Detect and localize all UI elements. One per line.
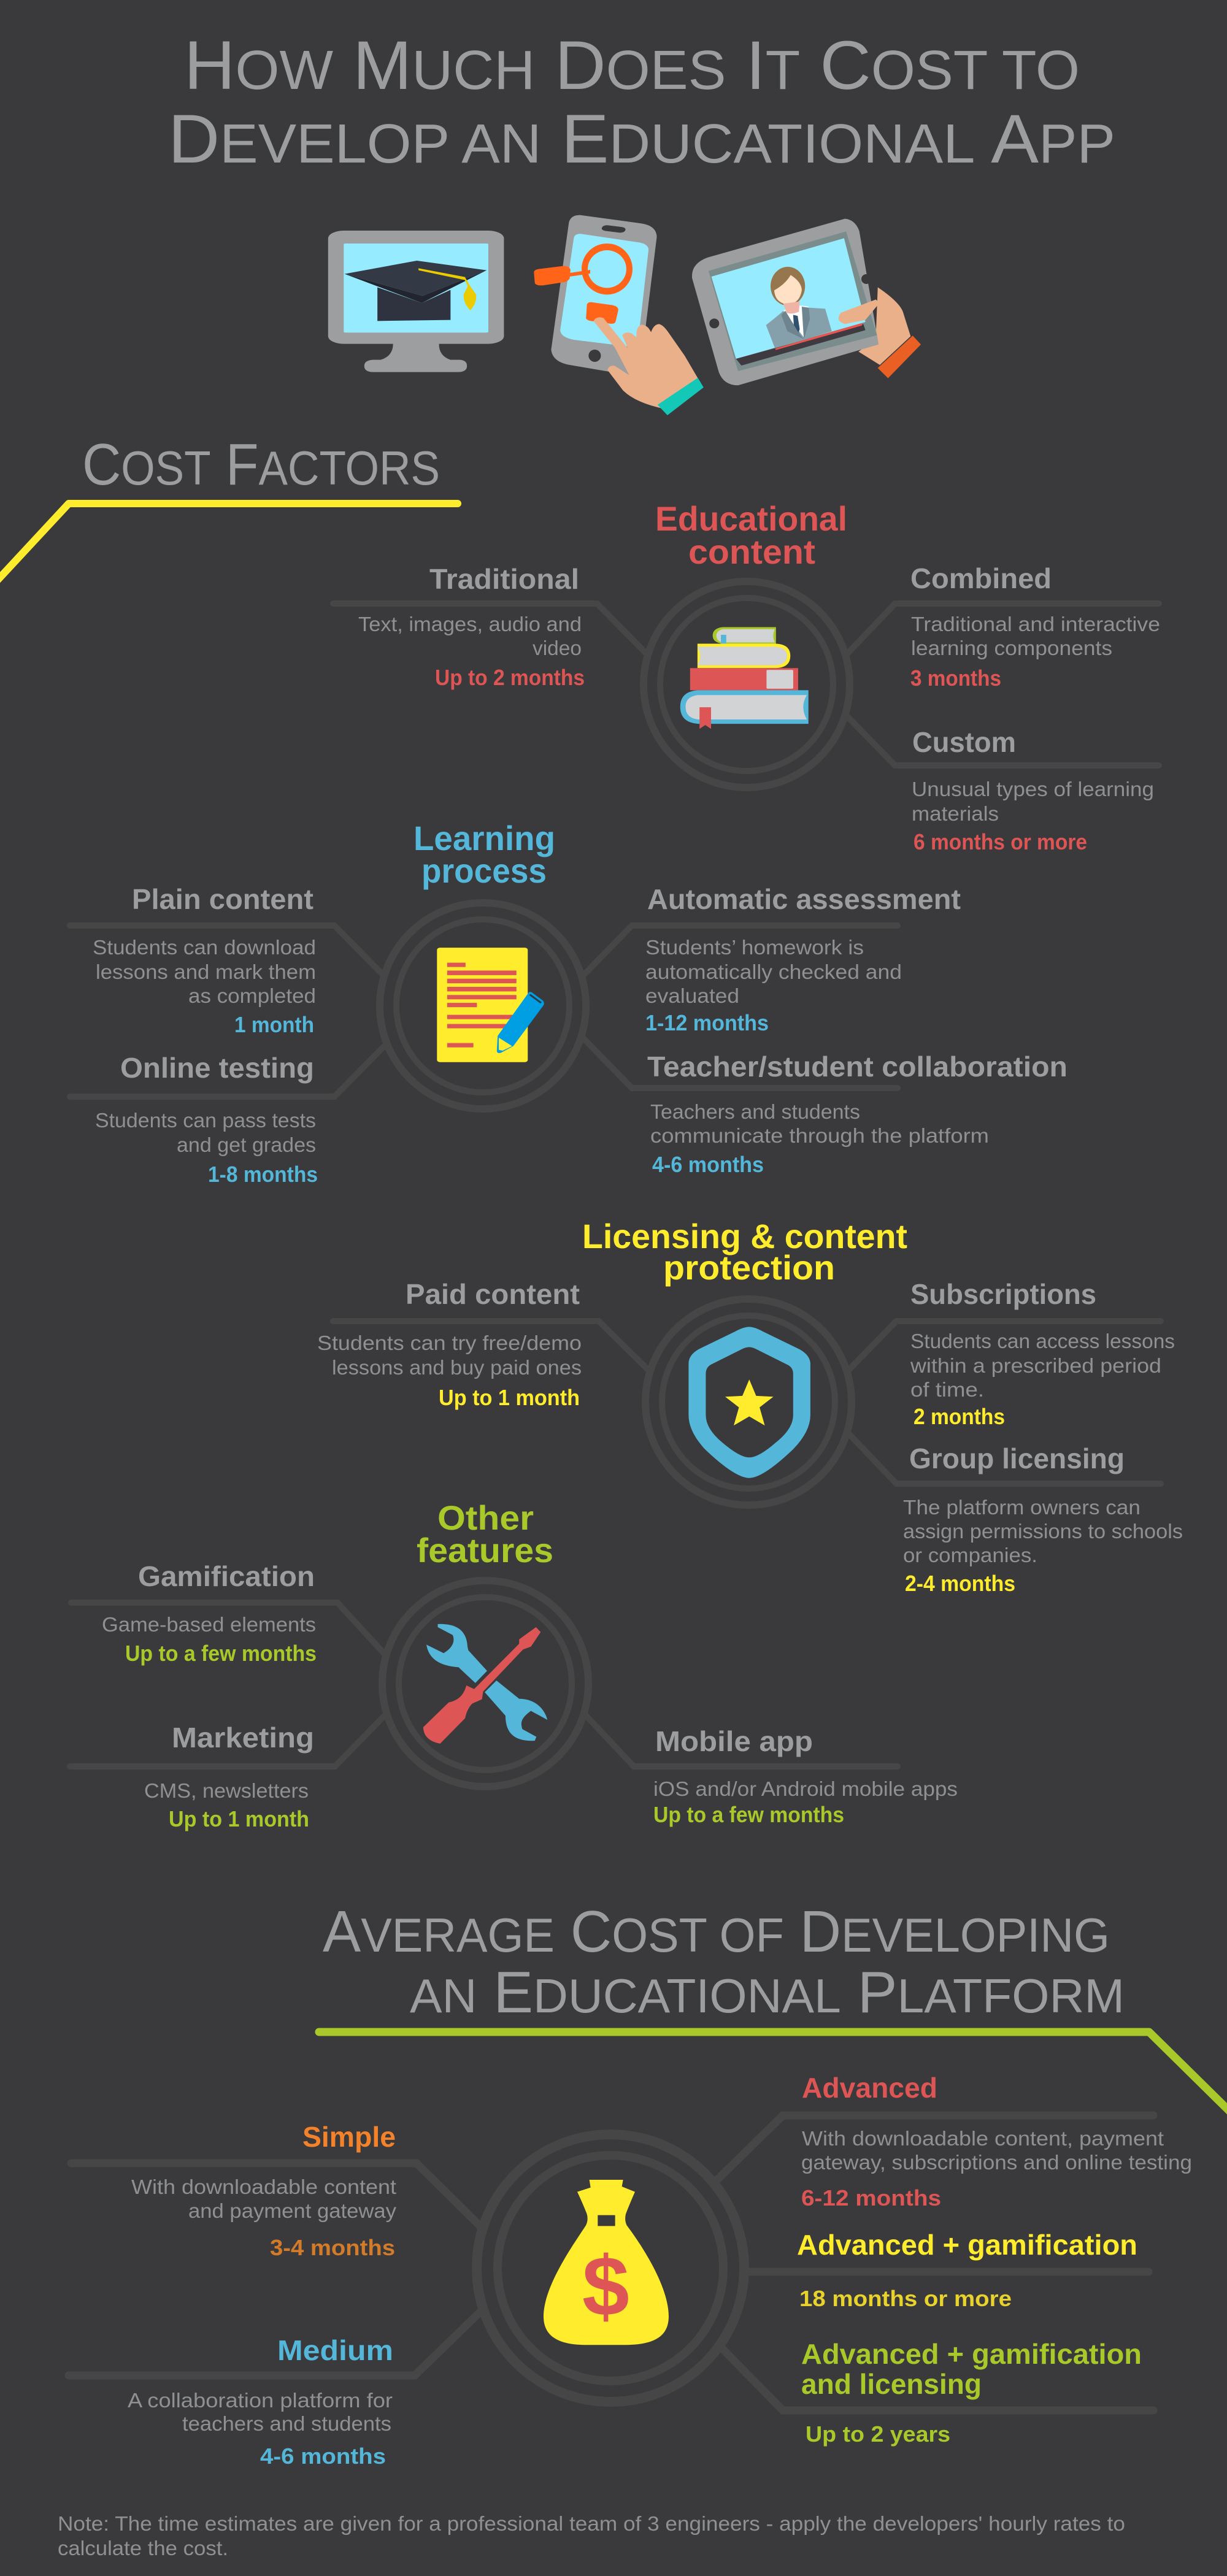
heading: learning process bbox=[413, 819, 555, 890]
item: simple: Simple bbox=[302, 2121, 396, 2153]
heading: other features bbox=[417, 1498, 553, 1570]
item: advanced: 6-12 months bbox=[801, 2185, 941, 2210]
item: medium: teachers and students bbox=[182, 2412, 391, 2435]
item: medium bbox=[128, 2334, 393, 2469]
connector lines bbox=[69, 2115, 1153, 2410]
footnote bbox=[58, 2512, 1125, 2559]
item: automatic assessment: evaluated bbox=[645, 984, 739, 1007]
icon: wrench and screwdriver bbox=[423, 1624, 547, 1744]
heading: licensing and content protection: protection bbox=[663, 1248, 835, 1287]
item: gamification: Game-based elements bbox=[102, 1613, 316, 1636]
panel: learning process bbox=[70, 819, 1067, 1187]
heading: other features: Other bbox=[437, 1498, 534, 1537]
item: advanced: With downloadable content, payment bbox=[802, 2127, 1164, 2150]
icon: shield with star bbox=[688, 1327, 810, 1478]
item: advanced + gamification and licensing: Advanced + gamification bbox=[801, 2338, 1142, 2370]
title bbox=[168, 27, 1115, 177]
item: advanced + gamification and licensing: and licensing bbox=[801, 2368, 982, 2400]
item: combined bbox=[910, 562, 1160, 691]
item: medium: A collaboration platform for bbox=[128, 2389, 393, 2412]
item: advanced: gateway, subscriptions and online testing bbox=[801, 2151, 1192, 2174]
item: teacher/student collaboration: Teacher/student collaboration bbox=[647, 1051, 1067, 1083]
item: advanced + gamification: Advanced + gamification bbox=[797, 2229, 1137, 2261]
icon: phone with magnifier and hand bbox=[534, 215, 704, 415]
item: teacher/student collaboration: 4-6 months bbox=[652, 1152, 764, 1177]
heading: average cost: AVERAGE COST OF DEVELOPING bbox=[323, 1899, 1110, 1965]
item: simple: and payment gateway bbox=[188, 2199, 397, 2222]
hero illustration: monitor, phone, tablet bbox=[328, 215, 921, 415]
icon: document and pencil bbox=[437, 948, 544, 1062]
icon: money bag bbox=[544, 2180, 669, 2345]
heading: other features: features bbox=[417, 1531, 553, 1570]
item: automatic assessment: Students’ homework is bbox=[645, 936, 864, 959]
heading: licensing and content protection bbox=[582, 1217, 907, 1287]
item: subscriptions: 2 months bbox=[914, 1404, 1005, 1429]
item: group licensing: Group licensing bbox=[909, 1443, 1125, 1474]
panel: educational content bbox=[333, 499, 1160, 854]
item: plain content: Plain content bbox=[132, 883, 313, 915]
item: paid content: lessons and buy paid ones bbox=[332, 1356, 582, 1379]
connector lines bbox=[70, 926, 898, 1097]
rings bbox=[645, 1299, 852, 1505]
item: paid content: Students can try free/demo bbox=[317, 1332, 582, 1354]
heading: average cost bbox=[323, 1899, 1125, 2025]
item: advanced: Advanced bbox=[802, 2072, 937, 2104]
item: plain content: lessons and mark them bbox=[96, 960, 316, 983]
item: subscriptions bbox=[910, 1278, 1175, 1429]
item: paid content: Up to 1 month bbox=[439, 1385, 580, 1410]
item: advanced + gamification and licensing: Up to 2 years bbox=[806, 2421, 950, 2447]
item: paid content bbox=[317, 1278, 582, 1410]
heading: educational content: content bbox=[688, 532, 815, 571]
heading: educational content bbox=[655, 499, 847, 571]
item: automatic assessment bbox=[645, 883, 961, 1035]
item: traditional: video bbox=[533, 637, 582, 659]
item: custom: 6 months or more bbox=[914, 829, 1087, 854]
item: subscriptions: within a prescribed period bbox=[910, 1354, 1161, 1377]
item: combined: learning components bbox=[911, 637, 1112, 659]
item: mobile app: Up to a few months bbox=[653, 1802, 844, 1827]
item: group licensing: 2-4 months bbox=[905, 1571, 1015, 1596]
item: custom: Custom bbox=[912, 726, 1016, 758]
item: traditional: Traditional bbox=[429, 563, 579, 595]
item: combined: 3 months bbox=[910, 665, 1001, 691]
item: group licensing: assign permissions to schools bbox=[903, 1520, 1183, 1543]
item: online testing: Students can pass tests bbox=[95, 1109, 316, 1132]
item: medium: Medium bbox=[277, 2334, 393, 2366]
heading: average cost: AN EDUCATIONAL PLATFORM bbox=[410, 1960, 1125, 2025]
item: plain content bbox=[93, 883, 316, 1037]
item: gamification: Up to a few months bbox=[125, 1641, 317, 1666]
panel: licensing and content protection bbox=[317, 1217, 1183, 1596]
footnote: Note: The time estimates are given for a professional team of 3 engineers - apply the developers' hourly rates to bbox=[58, 2512, 1125, 2535]
item: paid content: Paid content bbox=[406, 1278, 580, 1310]
item: automatic assessment: automatically checked and bbox=[645, 960, 902, 983]
title: HOW MUCH DOES IT COST TO bbox=[184, 27, 1080, 104]
panel: other features bbox=[70, 1498, 958, 1831]
item: online testing: and get grades bbox=[177, 1133, 316, 1156]
item: plain content: as completed bbox=[188, 984, 316, 1007]
item: custom: materials bbox=[912, 802, 999, 825]
item: automatic assessment: Automatic assessment bbox=[647, 883, 961, 915]
heading: licensing and content protection: Licensing & content bbox=[582, 1217, 907, 1255]
item: teacher/student collaboration: Teachers and students bbox=[650, 1100, 860, 1123]
item: group licensing: The platform owners can bbox=[903, 1496, 1140, 1519]
item: combined: Combined bbox=[910, 562, 1052, 594]
rings bbox=[380, 903, 586, 1109]
item: marketing: Marketing bbox=[172, 1722, 314, 1754]
item: combined: Traditional and interactive bbox=[911, 613, 1160, 635]
item: teacher/student collaboration: communicate through the platform bbox=[650, 1124, 989, 1147]
rings bbox=[382, 1581, 588, 1787]
item: group licensing: or companies. bbox=[903, 1544, 1037, 1566]
item: simple: With downloadable content bbox=[131, 2175, 396, 2198]
item: plain content: 1 month bbox=[234, 1012, 314, 1037]
item: online testing: 1-8 months bbox=[208, 1162, 318, 1187]
heading: educational content: Educational bbox=[655, 499, 847, 538]
item: mobile app: Mobile app bbox=[655, 1725, 813, 1757]
item: advanced + gamification: 18 months or more bbox=[799, 2286, 1012, 2311]
item: gamification: Gamification bbox=[138, 1560, 315, 1592]
item: marketing bbox=[144, 1722, 314, 1831]
item: group licensing bbox=[903, 1443, 1183, 1596]
green heading rule bbox=[319, 2032, 1227, 2115]
icon: monitor with graduation cap bbox=[328, 231, 504, 372]
connector lines bbox=[70, 1603, 898, 1766]
item: traditional: Text, images, audio and bbox=[358, 613, 582, 635]
item: plain content: Students can download bbox=[93, 936, 316, 959]
item: custom: Unusual types of learning bbox=[912, 778, 1154, 800]
icon: tablet with teacher and hand bbox=[692, 219, 921, 385]
footnote: calculate the cost. bbox=[58, 2537, 228, 2559]
icon: money bag: $ bbox=[582, 2239, 629, 2334]
item: mobile app bbox=[653, 1725, 958, 1827]
icon: stack of books bbox=[680, 627, 809, 729]
item: traditional bbox=[358, 563, 585, 690]
item: gamification bbox=[102, 1560, 317, 1666]
item: automatic assessment: 1-12 months bbox=[645, 1010, 769, 1035]
item: simple: 3-4 months bbox=[270, 2235, 395, 2260]
yellow heading rule bbox=[0, 504, 458, 581]
panel: average cost tiers bbox=[69, 2072, 1192, 2469]
connector lines bbox=[333, 1321, 1161, 1484]
item: online testing bbox=[95, 1052, 318, 1187]
item: subscriptions: Students can access lessons bbox=[910, 1330, 1175, 1352]
item: marketing: Up to 1 month bbox=[169, 1806, 309, 1831]
rings bbox=[644, 581, 850, 788]
item: advanced + gamification bbox=[797, 2229, 1137, 2311]
item: advanced + gamification and licensing bbox=[801, 2338, 1142, 2447]
item: marketing: CMS, newsletters bbox=[144, 1779, 309, 1802]
item: online testing: Online testing bbox=[120, 1052, 314, 1084]
item: mobile app: iOS and/or Android mobile apps bbox=[653, 1777, 958, 1800]
connector lines bbox=[333, 604, 1159, 765]
item: custom bbox=[912, 726, 1154, 854]
item: subscriptions: of time. bbox=[910, 1378, 984, 1401]
heading: learning process: Learning bbox=[413, 819, 555, 857]
item: traditional: Up to 2 months bbox=[435, 665, 585, 690]
item: advanced bbox=[801, 2072, 1192, 2210]
item: simple bbox=[131, 2121, 397, 2260]
item: medium: 4-6 months bbox=[260, 2444, 386, 2469]
heading: cost factors: COST FACTORS bbox=[82, 432, 440, 497]
item: teacher/student collaboration bbox=[647, 1051, 1067, 1177]
item: subscriptions: Subscriptions bbox=[910, 1278, 1096, 1310]
heading: learning process: process bbox=[421, 851, 547, 890]
title: DEVELOP AN EDUCATIONAL APP bbox=[168, 101, 1115, 177]
rings bbox=[477, 2134, 744, 2402]
